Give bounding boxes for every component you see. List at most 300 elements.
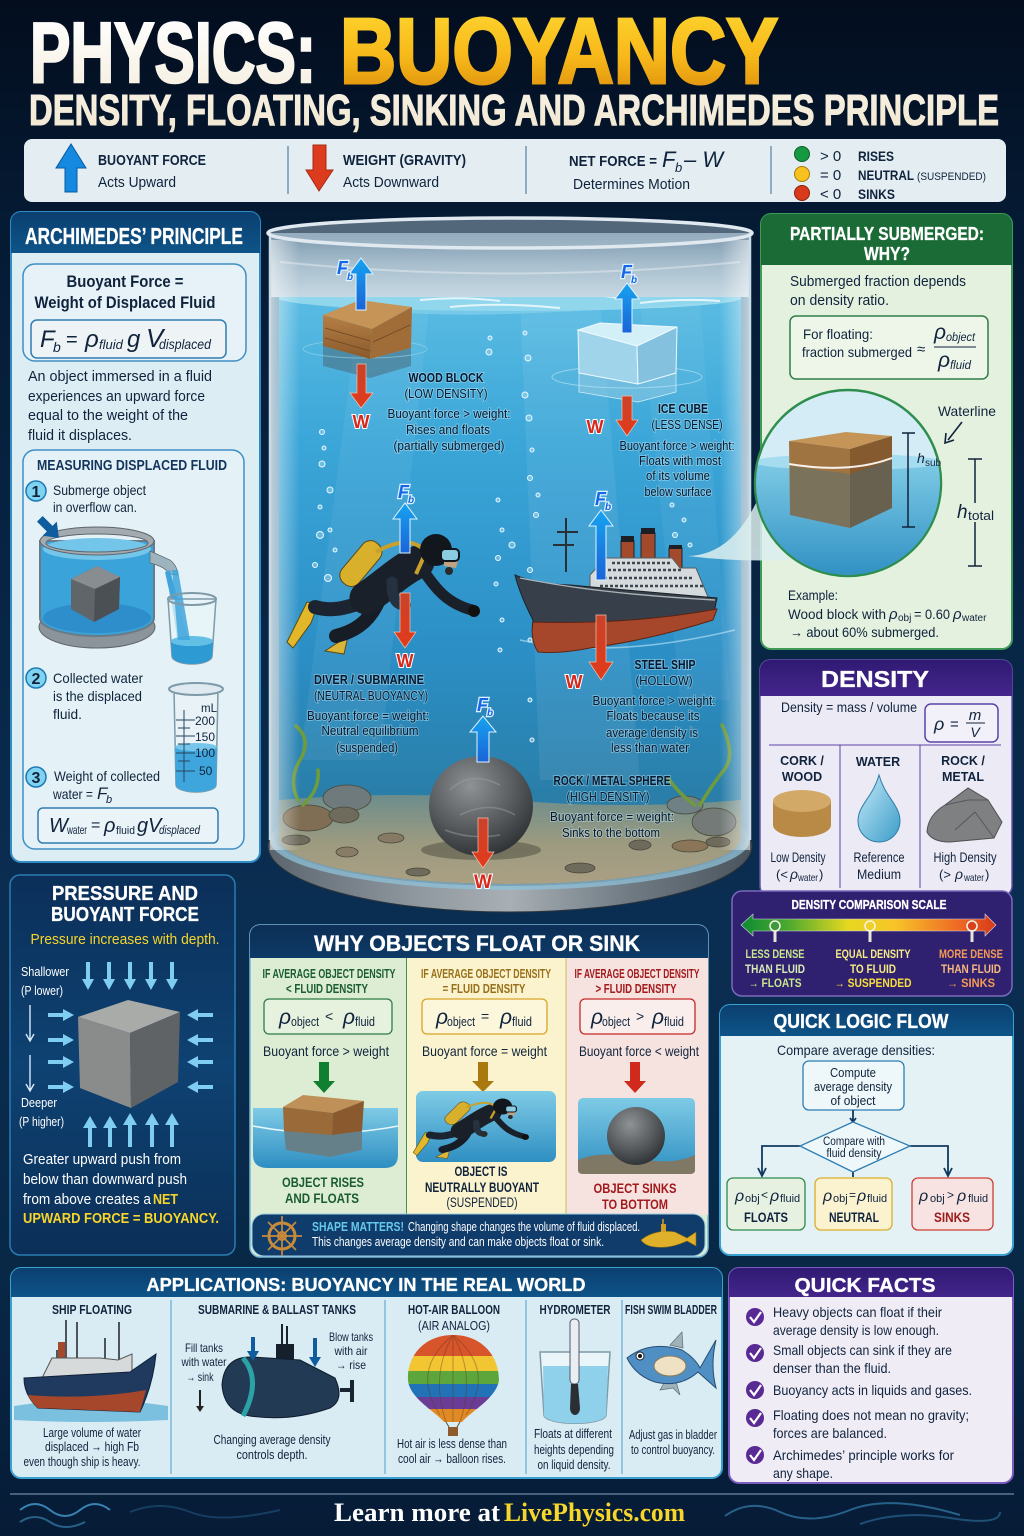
panel: density comparison scale — [732, 891, 1012, 996]
step 3: Weight of collected — [54, 768, 160, 784]
title — [30, 0, 778, 103]
label: diver: (NEUTRAL BUOYANCY) — [314, 688, 428, 703]
label: rock sphere: ROCK / METAL SPHERE — [554, 773, 671, 788]
label: wood block: (LOW DENSITY) — [404, 386, 488, 401]
panel: tank of objects in water — [268, 218, 752, 912]
water surface — [279, 297, 741, 311]
facts list: any shape. — [773, 1465, 833, 1481]
text: example: ρ — [888, 606, 898, 623]
label: wood block: Buoyant force > weight: — [388, 406, 510, 421]
text: ship floating: displaced → high Fb — [45, 1439, 139, 1454]
legend: net force: b — [675, 160, 682, 175]
formula: weight of water: g — [137, 815, 148, 837]
arrow: Fb on wood: F — [337, 258, 349, 278]
label: ice cube — [620, 401, 734, 499]
column: neutral: Buoyant force = weight — [422, 1043, 547, 1059]
column: sinks: IF AVERAGE OBJECT DENSITY — [574, 966, 700, 981]
header: quick logic flow — [720, 1005, 1013, 1036]
callout cone — [688, 490, 790, 560]
formula: buoyant force: g — [127, 326, 141, 353]
legend: net force outcomes: = 0 — [820, 167, 841, 184]
column: floats: Buoyant force > weight — [263, 1043, 389, 1059]
formula: fraction submerged: fluid — [950, 358, 971, 372]
object: wood block — [303, 258, 427, 432]
illustration: graduated cylinder: 200 — [195, 714, 215, 728]
column: neutral — [407, 958, 566, 1215]
column: sinks: ρ — [590, 1006, 603, 1029]
panel: Archimedes' principle — [11, 212, 260, 862]
title: BUOYANCY — [340, 0, 778, 103]
label: wood block: Rises and floats — [406, 422, 490, 437]
column: rock / metal: ROCK / — [941, 754, 985, 768]
step 3: b — [106, 794, 112, 806]
formula: fraction submerged: ≈ — [917, 341, 925, 358]
flow result: neutral — [815, 1178, 892, 1230]
text: pressure explanation: UPWARD FORCE = BUOYANCY. — [23, 1211, 219, 1227]
step 3: F — [97, 784, 109, 803]
header: why objects float or sink — [250, 925, 708, 958]
check icons — [746, 1308, 764, 1464]
text: example: water — [961, 613, 987, 624]
scale label: more dense — [939, 947, 1003, 990]
flow result: floats: ρ — [734, 1188, 744, 1205]
application: hot-air balloon: HOT-AIR BALLOON — [408, 1302, 500, 1317]
column: rock / metal: water — [963, 872, 984, 884]
labels: shallower and deeper: (P higher) — [19, 1114, 64, 1129]
column: floats: OBJECT RISES — [282, 1174, 364, 1190]
definition box — [23, 264, 246, 361]
formula: density: ρ — [933, 714, 944, 734]
column: cork / wood: Low Density — [770, 850, 826, 865]
scale arrow — [741, 914, 996, 942]
arrow: Fb on diver: F — [398, 482, 410, 502]
illustration: graduated cylinder: 100 — [195, 746, 215, 760]
arrow: Fb on wood — [337, 258, 373, 310]
ballast arrows — [196, 1337, 321, 1412]
column: sinks: object — [602, 1015, 630, 1029]
flow diamond: fluid density — [826, 1148, 882, 1160]
callout: shape matters: Changing shape changes the volume of fluid displaced. — [408, 1219, 640, 1234]
label: waterline: Waterline — [938, 403, 996, 419]
formula: density: m — [969, 707, 981, 724]
label: ice cube: of its volume — [646, 468, 710, 483]
formula: density — [925, 704, 998, 742]
label: steel ship — [592, 657, 716, 755]
panel: why objects float or sink — [250, 925, 708, 1257]
dimension: h total: h — [957, 502, 968, 523]
formula: weight of water: ρ — [103, 815, 115, 837]
label: wood block — [388, 370, 510, 453]
column: neutral: ρ — [435, 1006, 448, 1029]
labels: shallower and deeper — [19, 964, 70, 1129]
header: why objects float or sink: WHY OBJECTS FLOAT OR SINK — [314, 931, 640, 956]
column: rock / metal: ) — [985, 867, 989, 882]
legend bar — [24, 139, 1006, 203]
flow result: sinks: > — [947, 1188, 954, 1202]
column: cork / wood — [770, 754, 831, 884]
icon: buoyant force arrow — [56, 144, 86, 192]
formula: fraction submerged: ρ — [933, 321, 946, 344]
application: ship floating — [14, 1302, 168, 1422]
dimension: h sub: sub — [925, 458, 942, 469]
ballast labels: Fill tanks — [185, 1341, 223, 1355]
principle description: equal to the weight of the — [28, 407, 188, 424]
formula: weight of water: water — [66, 823, 87, 837]
application: submarine: SUBMARINE & BALLAST TANKS — [198, 1302, 356, 1317]
flow result: neutral: = — [849, 1188, 856, 1202]
column: rock / metal — [927, 754, 1002, 884]
column: sinks: fluid — [664, 1015, 684, 1029]
labels: shallower and deeper: (P lower) — [21, 983, 63, 998]
application: fish swim bladder — [625, 1302, 717, 1457]
header: quick facts: QUICK FACTS — [794, 1275, 936, 1297]
illustration: graduated cylinder: mL — [201, 703, 218, 715]
scale label: equal density: → SUSPENDED — [834, 976, 912, 990]
formula: buoyant force: F — [40, 326, 56, 353]
formula: fraction submerged — [790, 316, 988, 379]
step 1: Submerge object — [53, 482, 146, 498]
flow result: floats: ρ — [769, 1188, 779, 1205]
illustration: graduated cylinder: 150 — [195, 730, 215, 744]
flow result: floats: obj — [745, 1193, 760, 1205]
text: density definition: Density = mass / volume — [781, 699, 917, 715]
legend: net force: – W — [683, 147, 725, 172]
text: pressure explanation: below than downward push — [23, 1172, 187, 1188]
rim and glass highlights — [268, 218, 752, 850]
label: steel ship: Floats because its — [606, 708, 700, 723]
text: compare: Compare average densities: — [777, 1042, 935, 1058]
facts list: forces are balanced. — [773, 1425, 887, 1441]
arrow: W on diver: W — [396, 651, 414, 671]
column: floats: < FLUID DENSITY — [286, 981, 368, 996]
legend: net force outcomes: < 0 — [820, 186, 841, 203]
formula: fraction submerged: fraction submerged — [802, 344, 912, 360]
pressure arrows — [48, 962, 213, 1147]
facts list: Buoyancy acts in liquids and gases. — [773, 1382, 972, 1398]
column: neutral: fluid — [512, 1015, 532, 1029]
text: example: ρ — [952, 606, 962, 623]
formula: weight of water: W — [49, 815, 70, 837]
arrow: Fb on ship: F — [595, 489, 607, 509]
flow box: compute — [803, 1061, 904, 1110]
label: ice cube: Floats with most — [639, 453, 721, 468]
callout: shape matters — [252, 1214, 705, 1256]
text: pressure explanation: Greater upward push from — [23, 1152, 181, 1168]
illustration: overflow can — [33, 512, 216, 664]
flow diamond — [800, 1122, 910, 1172]
object: diver — [287, 482, 480, 671]
legend: weight — [343, 152, 466, 191]
illustration: pressure cube — [78, 1000, 180, 1108]
column: sinks: > — [636, 1008, 644, 1024]
ballast labels: with air — [334, 1344, 368, 1358]
sub-panel: measuring displaced fluid — [23, 450, 244, 849]
scale label: equal density: TO FLUID — [850, 962, 896, 976]
facts list — [773, 1304, 972, 1481]
text: example: Wood block with — [788, 606, 886, 622]
text: example: → about 60% submerged. — [790, 624, 939, 640]
text: ship floating: even though ship is heavy. — [24, 1454, 140, 1469]
formula: buoyant force: b — [53, 339, 61, 355]
arrow: W on wood: W — [352, 412, 370, 432]
text: example: Example: — [788, 587, 838, 603]
scale label: less dense: LESS DENSE — [746, 947, 804, 961]
principle description: An object immersed in a fluid — [28, 368, 212, 385]
column: cork / wood: ρ — [789, 866, 798, 882]
heading: pressure: PRESSURE AND — [52, 883, 198, 905]
column: cork / wood: water — [797, 872, 818, 884]
column: neutral: ρ — [499, 1006, 512, 1029]
column: sinks: OBJECT SINKS — [594, 1180, 676, 1196]
column: cork / wood: CORK / — [780, 754, 824, 768]
facts list: Heavy objects can float if their — [773, 1304, 942, 1320]
label: steel ship: (HOLLOW) — [636, 673, 692, 688]
column: sinks — [567, 958, 708, 1215]
column: cork / wood: (< — [776, 867, 788, 882]
scale label: equal density — [834, 947, 912, 990]
footer — [10, 1494, 1014, 1527]
label: ice cube: ICE CUBE — [658, 401, 708, 416]
seaweed — [293, 725, 730, 805]
application: hot-air balloon: (AIR ANALOG) — [418, 1318, 490, 1333]
object: rock sphere — [421, 695, 541, 893]
application: hot-air balloon: cool air → balloon rises. — [398, 1451, 506, 1466]
column: floats: ρ — [278, 1006, 291, 1029]
arrow: Fb on sphere — [470, 695, 496, 762]
column: neutral: NEUTRALLY BUOYANT — [425, 1180, 540, 1195]
dimension: h sub: h — [917, 450, 925, 466]
flow result: floats: fluid — [780, 1193, 800, 1205]
labels: shallower and deeper: Shallower — [21, 964, 70, 979]
callout: shape matters: SHAPE MATTERS! — [312, 1219, 404, 1234]
arrow: Fb on ship: b — [605, 502, 611, 513]
column: floats — [251, 958, 406, 1215]
panel: density — [760, 660, 1012, 896]
legend: net force outcomes: > 0 — [820, 148, 841, 165]
ballast labels — [181, 1330, 373, 1384]
arrow: Fb on sphere: F — [477, 695, 489, 715]
text: ship floating — [24, 1425, 142, 1469]
formula: fraction submerged: ρ — [937, 349, 950, 372]
column: rock / metal: ρ — [954, 866, 963, 882]
flow result: sinks: ρ — [956, 1188, 966, 1205]
scale label: equal density: EQUAL DENSITY — [836, 947, 910, 961]
step 2: Collected water — [53, 670, 143, 686]
formula: buoyant force: fluid — [99, 337, 124, 352]
text: pressure explanation — [23, 1152, 219, 1227]
flow result: sinks: ρ — [918, 1188, 928, 1205]
arrow: Fb on ice — [615, 262, 639, 333]
application: hydrometer: on liquid density. — [538, 1457, 610, 1472]
label: steel ship: average density is — [606, 725, 698, 740]
heading: pressure: Pressure increases with depth. — [30, 932, 220, 948]
formula: weight of water — [38, 808, 218, 843]
column: sinks: > FLUID DENSITY — [596, 981, 677, 996]
label: wood block: WOOD BLOCK — [408, 370, 484, 385]
text: pressure explanation: from above creates a — [23, 1192, 152, 1208]
column: neutral: = — [481, 1008, 489, 1024]
label: ice cube: below surface — [644, 484, 712, 499]
column: floats: fluid — [355, 1015, 375, 1029]
flow result: floats: FLOATS — [744, 1209, 788, 1225]
facts list: Archimedes’ principle works for — [773, 1447, 954, 1463]
arrow: W on ice: W — [586, 417, 604, 437]
formula: weight of water: displaced — [159, 823, 200, 837]
legend: net force outcomes: NEUTRAL — [858, 167, 914, 183]
column: water: Medium — [857, 867, 901, 882]
footer: LivePhysics.com — [504, 1498, 685, 1527]
header: quick logic flow: QUICK LOGIC FLOW — [774, 1011, 949, 1033]
legend: net force outcomes: RISES — [858, 148, 894, 164]
column: cork / wood: ) — [819, 867, 823, 882]
header: density — [760, 660, 1012, 696]
step 2: fluid. — [53, 706, 82, 722]
step 1: 1 — [32, 484, 41, 501]
title: PHYSICS: — [30, 6, 316, 101]
column: floats: ρ — [342, 1006, 355, 1029]
formula: weight of water: fluid — [116, 825, 135, 837]
label: steel ship: Buoyant force > weight: — [592, 693, 716, 708]
flow result: neutral: ρ — [856, 1188, 866, 1205]
icon: yellow submarine — [641, 1219, 696, 1247]
flow result: neutral: obj — [833, 1193, 848, 1205]
column: neutral: (SUSPENDED) — [446, 1195, 518, 1210]
panel: applications — [11, 1268, 722, 1478]
header: partially submerged: PARTIALLY SUBMERGED: — [790, 224, 984, 244]
water — [279, 285, 741, 900]
column: rock / metal: High Density — [934, 850, 997, 865]
dimension: h total: total — [968, 508, 994, 523]
formula: density: V — [970, 724, 981, 740]
arrow: W on ship: W — [566, 672, 582, 692]
label: diver: (suspended) — [336, 740, 398, 755]
formula: buoyant force — [31, 320, 226, 358]
arrow: Fb on ship — [589, 489, 613, 580]
label: rock sphere: Sinks to the bottom — [562, 825, 660, 840]
column: water — [854, 755, 904, 882]
callout: shape matters: This changes average density and can make objects float or sink. — [312, 1234, 604, 1249]
flow box: compute: of object — [830, 1094, 876, 1108]
arrow: W on wood — [350, 364, 373, 432]
label: ice cube: (LESS DENSE) — [652, 417, 722, 432]
illustration: floating block — [253, 1095, 398, 1168]
legend: net force: F — [662, 147, 677, 172]
column: water: WATER — [856, 755, 900, 769]
label: rock sphere: Buoyant force = weight: — [550, 809, 674, 824]
label: wood block: (partially submerged) — [394, 438, 504, 453]
column: neutral: object — [447, 1015, 475, 1029]
step 3: 3 — [32, 770, 41, 787]
arrow: W on sphere: W — [474, 872, 492, 893]
column: floats: AND FLOATS — [285, 1190, 359, 1206]
panel: partially submerged — [688, 214, 1012, 649]
legend: net force: Determines Motion — [573, 176, 690, 193]
application: hydrometer — [534, 1302, 614, 1472]
footer: Learn more at — [334, 1498, 500, 1527]
scale label: less dense: → FLOATS — [748, 976, 802, 990]
flow result: floats — [727, 1178, 805, 1230]
header: applications: APPLICATIONS: BUOYANCY IN THE REAL WORLD — [146, 1275, 586, 1295]
illustration: suspended diver — [413, 1091, 556, 1162]
column: neutral: = FLUID DENSITY — [442, 981, 526, 996]
label: diver: Neutral equilibrium — [322, 723, 418, 738]
text: example: = 0.60 — [914, 606, 950, 622]
formula: weight of water: = — [91, 817, 100, 834]
ship waterline ripple — [520, 630, 735, 648]
tank base — [268, 780, 752, 912]
legend: weight: Acts Downward — [343, 174, 439, 191]
legend: net force outcomes — [794, 146, 986, 203]
flow result: neutral: fluid — [867, 1193, 887, 1205]
label: waterline — [938, 403, 996, 443]
ballast labels: → rise — [336, 1358, 366, 1372]
illustration: collecting beaker — [168, 570, 216, 664]
header: partially submerged: WHY? — [864, 244, 910, 264]
legend: net force — [569, 147, 725, 193]
header: partially submerged — [761, 214, 1012, 265]
application: fish swim bladder: to control buoyancy. — [631, 1442, 715, 1457]
arrow: Fb on wood: b — [347, 272, 353, 283]
column: rock / metal: METAL — [942, 770, 984, 784]
label: steel ship: STEEL SHIP — [634, 657, 696, 672]
seabed — [279, 795, 741, 884]
scale label: more dense: MORE DENSE — [939, 947, 1003, 961]
principle description: experiences an upward force — [28, 388, 205, 405]
application: fish swim bladder: FISH SWIM BLADDER — [625, 1302, 717, 1317]
text: example: obj — [898, 613, 911, 624]
column: neutral: OBJECT IS — [454, 1164, 508, 1179]
panel: quick logic flow — [720, 1005, 1013, 1255]
labels: shallower and deeper: Deeper — [21, 1095, 58, 1110]
panel: density comparison scale: DENSITY COMPARISON SCALE — [792, 898, 946, 912]
facts list: denser than the fluid. — [773, 1360, 891, 1376]
flow diamond: Compare with — [823, 1136, 885, 1148]
application: hydrometer: Floats at different — [534, 1426, 612, 1441]
flow result: floats: < — [761, 1188, 768, 1202]
step 2 — [26, 668, 143, 722]
column: sinks: Buoyant force < weight — [579, 1043, 699, 1059]
text: density ratio — [790, 273, 966, 309]
column: floats: IF AVERAGE OBJECT DENSITY — [262, 966, 396, 981]
definition box: Buoyant Force = — [66, 272, 184, 291]
panel: quick facts — [729, 1268, 1013, 1483]
arrow: W on sphere — [472, 818, 494, 893]
icon: ship wheel — [262, 1216, 302, 1256]
application: submarine: controls depth. — [236, 1447, 308, 1462]
scale label: less dense: THAN FLUID — [745, 962, 805, 976]
legend: buoyant force: BUOYANT FORCE — [98, 152, 206, 169]
header: quick facts — [729, 1268, 1013, 1297]
facts list: Floating does not mean no gravity; — [773, 1407, 969, 1423]
column: floats: object — [291, 1015, 319, 1029]
column: sinks: TO BOTTOM — [602, 1196, 668, 1212]
step 3 — [26, 767, 160, 806]
column: neutral: IF AVERAGE OBJECT DENSITY — [421, 966, 551, 981]
flow result: neutral: NEUTRAL — [829, 1209, 879, 1225]
arrow: Fb on sphere: b — [487, 708, 493, 719]
legend: net force outcomes: (SUSPENDED) — [917, 171, 986, 183]
label: rock sphere — [550, 773, 674, 840]
flow result: sinks — [912, 1178, 993, 1230]
ballast labels: → sink — [186, 1370, 214, 1384]
flow arrows — [758, 1110, 952, 1177]
arrow: W on ship — [566, 615, 613, 692]
formula: buoyant force: ρ — [84, 326, 99, 353]
text: density ratio: Submerged fraction depends — [790, 273, 966, 290]
decorative waves — [20, 1503, 1000, 1527]
label: diver — [307, 672, 429, 755]
text: example — [788, 587, 987, 640]
